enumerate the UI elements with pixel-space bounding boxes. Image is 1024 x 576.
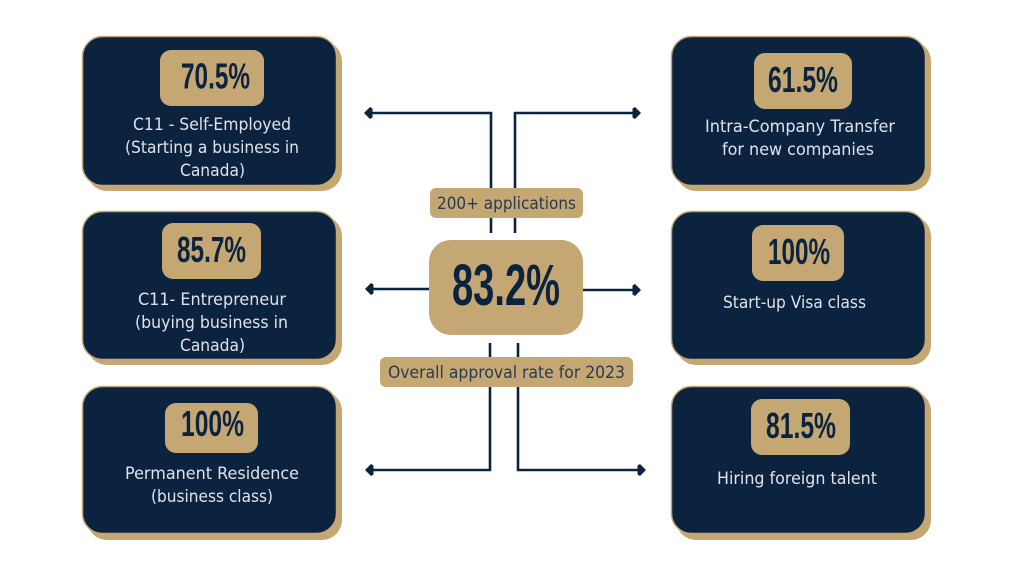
panel: C11 self-employed bbox=[82, 36, 342, 191]
text: C11 self-employed label bbox=[125, 115, 299, 180]
text: C11 self-employed label: Canada) bbox=[180, 161, 245, 180]
text: C11 entrepreneur label bbox=[135, 290, 288, 355]
text: hiring foreign talent label: Hiring foreign talent bbox=[717, 469, 878, 488]
text: permanent residence label: (business class) bbox=[151, 487, 273, 506]
stat: 100% right bbox=[752, 225, 844, 281]
panel: intra-company transfer bbox=[672, 36, 931, 191]
text: permanent residence label bbox=[125, 464, 299, 506]
panel: C11 entrepreneur bbox=[82, 212, 342, 365]
arrow: centre to middle left card bbox=[365, 283, 429, 295]
stat: 61.5%: 61.5% bbox=[768, 59, 838, 100]
stat: 61.5% bbox=[754, 53, 852, 109]
panel: hiring foreign talent bbox=[672, 386, 931, 540]
text: C11 entrepreneur label: C11- Entrepreneur bbox=[138, 290, 286, 309]
centre stat: 83.2% bbox=[429, 240, 583, 335]
stat: 70.5% bbox=[160, 50, 264, 106]
text: C11 entrepreneur label: Canada) bbox=[180, 336, 245, 355]
callout: 200+ applications bbox=[430, 188, 583, 218]
callout: overall approval rate: Overall approval rate for 2023 bbox=[388, 363, 625, 382]
centre stat: 83.2%: 83.2% bbox=[452, 253, 560, 318]
text: intra-company transfer label bbox=[705, 117, 895, 159]
text: C11 self-employed label: C11 - Self-Employed bbox=[133, 115, 291, 134]
arrow: centre to bottom left card bbox=[365, 343, 490, 476]
stat: 100% left: 100% bbox=[181, 403, 244, 444]
panel: permanent residence bbox=[82, 386, 342, 540]
text: permanent residence label: Permanent Residence bbox=[125, 464, 299, 483]
arrow: centre to top left card bbox=[364, 107, 491, 233]
stat: 81.5% bbox=[751, 399, 850, 455]
callout: overall approval rate bbox=[380, 357, 633, 387]
text: intra-company transfer label: for new companies bbox=[722, 140, 874, 159]
panel: start-up visa bbox=[672, 212, 931, 365]
arrow: centre to bottom right card bbox=[518, 343, 646, 476]
stat: 85.7% bbox=[162, 223, 261, 279]
stat: 85.7%: 85.7% bbox=[177, 229, 246, 270]
arrow: centre to middle right card bbox=[583, 284, 641, 296]
text: C11 self-employed label: (Starting a business in bbox=[125, 138, 299, 157]
stat: 70.5%: 70.5% bbox=[181, 56, 250, 96]
stat: 81.5%: 81.5% bbox=[766, 405, 836, 446]
callout: 200+ applications: 200+ applications bbox=[437, 194, 576, 213]
stat: 100% left bbox=[165, 403, 258, 453]
text: C11 entrepreneur label: (buying business in bbox=[135, 313, 288, 332]
text: intra-company transfer label: Intra-Company Transfer bbox=[705, 117, 895, 136]
stat: 100% right: 100% bbox=[768, 231, 830, 272]
arrow: centre to top right card bbox=[515, 107, 641, 233]
text: start-up visa label: Start-up Visa class bbox=[723, 293, 866, 312]
